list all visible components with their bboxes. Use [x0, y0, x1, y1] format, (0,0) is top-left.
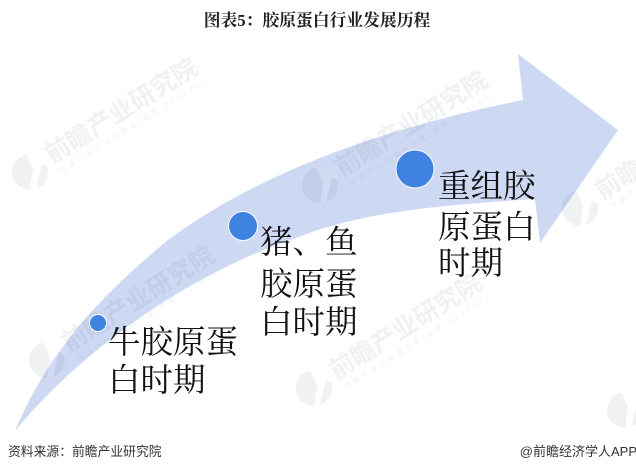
- milestone label: pig and fish: 胶原蛋: [260, 266, 358, 303]
- milestone dot: bovine: [90, 314, 106, 332]
- milestone label: bovine: 白时期: [108, 362, 206, 399]
- milestone: pig and fish collagen period: [228, 212, 358, 341]
- milestone label: bovine: 牛胶原蛋: [108, 324, 238, 361]
- title: 图表5：胶原蛋白行业发展历程: [204, 10, 430, 30]
- milestone label: pig and fish: 白时期: [260, 304, 358, 341]
- arrow: development timeline: [15, 54, 618, 431]
- source note: 资料来源：前瞻产业研究院: [8, 444, 162, 459]
- milestone label: recombinant: 原蛋白: [438, 209, 536, 246]
- watermarks: [12, 53, 636, 428]
- milestone: recombinant collagen period: [396, 150, 537, 282]
- milestone dot: pig and fish: [228, 212, 258, 240]
- milestone dot: recombinant: [396, 150, 434, 188]
- brand credit: @前瞻经济学人APP: [520, 444, 636, 459]
- milestone label: recombinant: 时期: [438, 246, 503, 282]
- milestone: bovine collagen period: [90, 314, 238, 399]
- milestone label: recombinant: 重组胶: [438, 168, 537, 205]
- milestone label: pig and fish: 猪、鱼: [260, 224, 358, 261]
